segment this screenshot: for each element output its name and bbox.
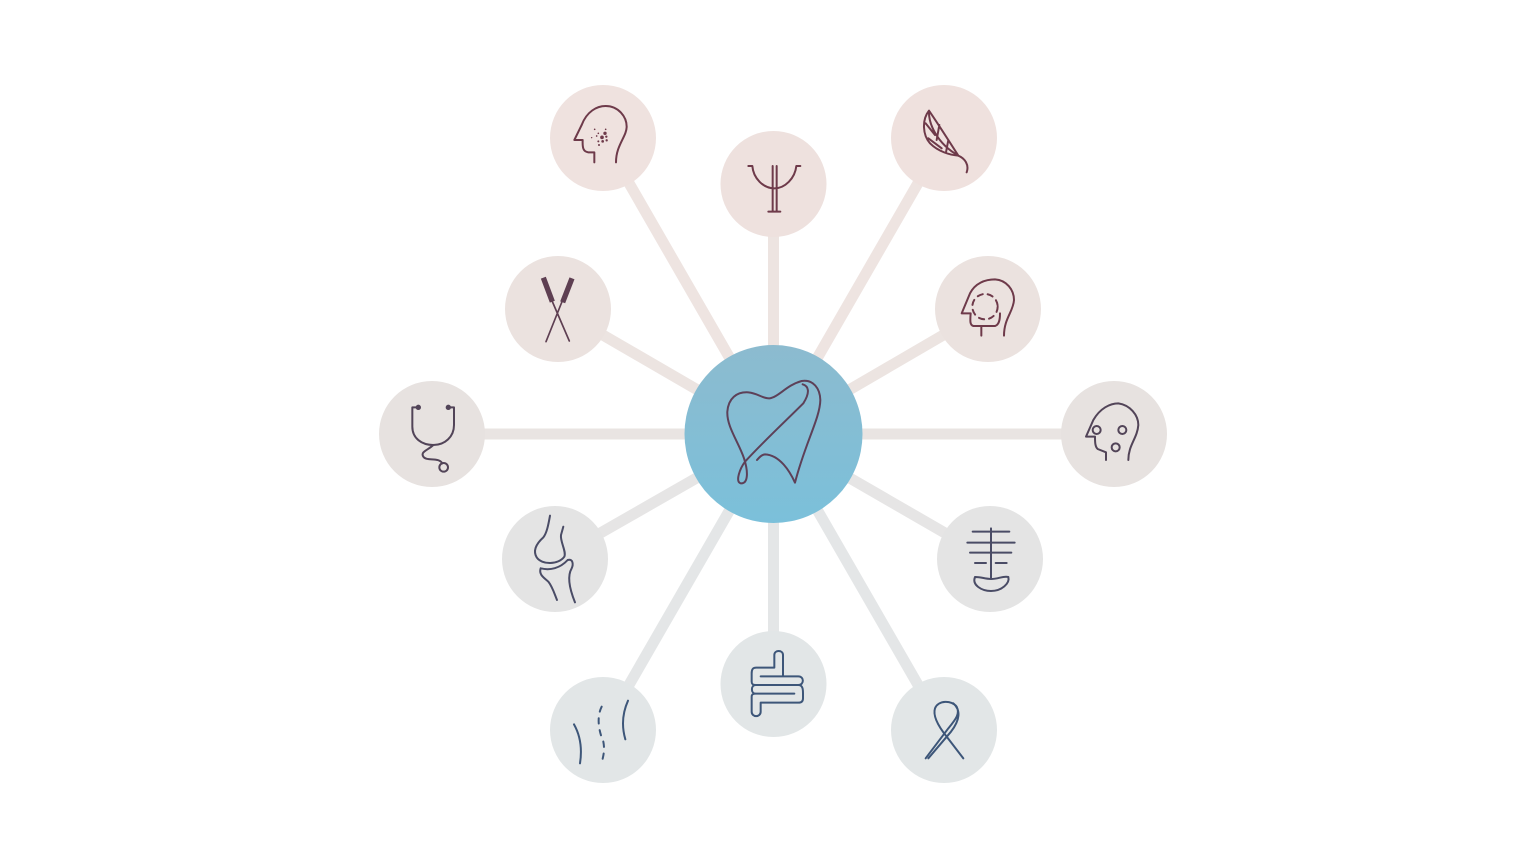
icon: head with dashed circle xyxy=(962,279,1014,336)
node: head with three points xyxy=(1061,381,1167,487)
icon: awareness ribbon xyxy=(926,702,963,758)
node: psychology xyxy=(720,131,826,237)
node: knee joint xyxy=(502,506,608,612)
node: head with dashed face circle xyxy=(935,256,1041,362)
icon: intestines xyxy=(752,651,803,716)
icon: leaf xyxy=(924,111,967,172)
icon: head with skin spots xyxy=(574,106,627,162)
icon: spine and pelvis xyxy=(967,528,1015,591)
node: leaf xyxy=(891,85,997,191)
icon: stethoscope xyxy=(412,405,454,472)
icon: psi symbol xyxy=(748,166,800,212)
node: acupuncture needles xyxy=(505,256,611,362)
node: dashed body lines xyxy=(550,677,656,783)
icon: head with circles xyxy=(1086,403,1138,460)
node: spine x-ray xyxy=(937,506,1043,612)
icon: tooth line drawing xyxy=(727,381,820,483)
node: intestines xyxy=(720,631,826,737)
node: ribbon xyxy=(891,677,997,783)
icon: crossed needles xyxy=(543,278,572,342)
icon: knee joint xyxy=(535,516,575,602)
node: stethoscope xyxy=(379,381,485,487)
central hub: tooth xyxy=(684,345,862,523)
connector spokes xyxy=(432,138,1114,730)
node: head with spots xyxy=(550,85,656,191)
icon: body contour lines xyxy=(574,701,628,763)
